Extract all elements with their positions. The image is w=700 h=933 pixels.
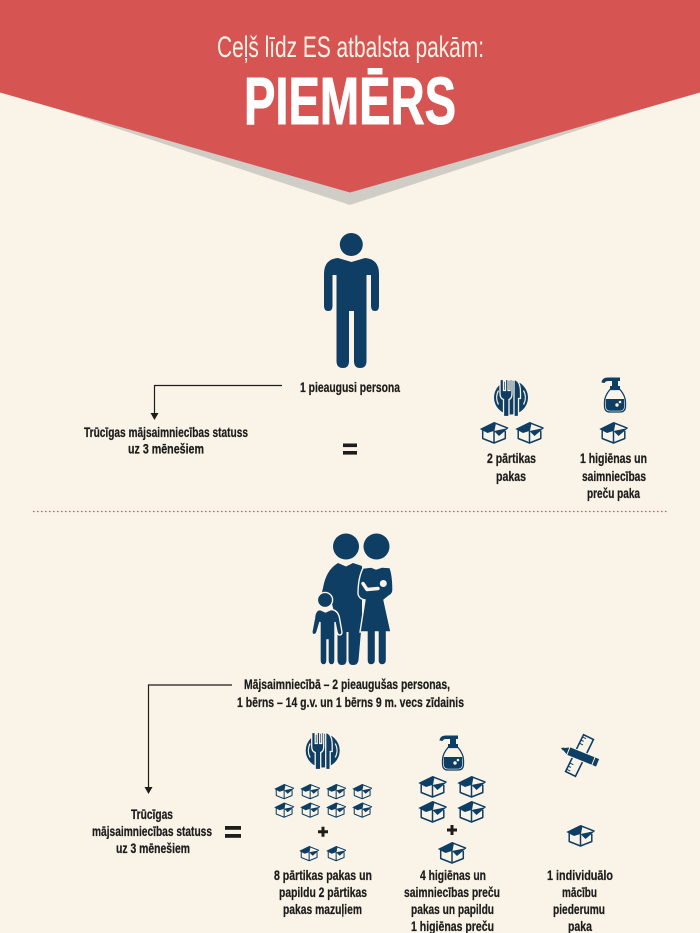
text: school pack: 1 individuālo bbox=[547, 867, 613, 883]
text: hygiene pack bbox=[580, 450, 647, 501]
text: school pack: mācību bbox=[562, 884, 597, 900]
icon: soap bbox=[602, 378, 626, 412]
text: hygiene packs 2: 4 higiēnas un bbox=[420, 867, 486, 883]
text: status 2: uz 3 mēnešiem bbox=[116, 840, 190, 856]
icon: plate 2 bbox=[306, 732, 340, 770]
text: school pack bbox=[547, 867, 613, 933]
icon: 4 hygiene boxes bbox=[418, 776, 486, 822]
text: school pack: piederumu bbox=[553, 901, 605, 917]
arrow: adult to status bbox=[150, 386, 282, 420]
icon: extra hygiene box bbox=[438, 842, 466, 863]
icon: plate bbox=[494, 380, 528, 416]
man bbox=[321, 534, 362, 665]
text: food packs 2: pakas mazuļiem bbox=[283, 901, 362, 917]
text: status: uz 3 mēnešiem bbox=[128, 440, 204, 456]
icon: 2 baby food boxes bbox=[299, 846, 346, 861]
text: household label: 1 bērns – 14 g.v. un 1 bērns 9 m. vecs zīdainis bbox=[237, 694, 464, 710]
equals sign 2 bbox=[225, 826, 241, 838]
arrow: household to status bbox=[144, 685, 232, 794]
text: hygiene pack: preču paka bbox=[587, 485, 640, 501]
text: status: Trūcīgas mājsaimniecības statuss bbox=[84, 424, 248, 440]
text: status 2: Trūcīgas bbox=[131, 806, 173, 822]
child bbox=[312, 592, 342, 665]
text: hygiene pack: 1 higiēnas un bbox=[580, 450, 647, 466]
icon: soap 2 bbox=[440, 736, 464, 770]
text: household label: Mājsaimniecībā – 2 pieaugušas personas, bbox=[244, 676, 450, 692]
text: adult label: 1 pieaugusi persona bbox=[300, 379, 400, 395]
icon: hygiene box bbox=[599, 422, 628, 443]
text: food packs: pakas bbox=[496, 468, 526, 484]
title: Ceļš līdz ES atbalsta pakām: bbox=[217, 31, 484, 64]
icon: school box bbox=[566, 825, 595, 846]
woman bbox=[358, 534, 393, 665]
text: food packs 2: 8 pārtikas pakas un bbox=[274, 867, 372, 883]
icon: family bbox=[312, 534, 393, 665]
icon: adult person bbox=[324, 233, 379, 368]
equals sign bbox=[343, 444, 357, 455]
plus sign 2 bbox=[447, 825, 457, 835]
text: food packs bbox=[487, 450, 536, 484]
icon: 8 food boxes bbox=[274, 784, 372, 817]
text: hygiene packs 2: pakas un papildu bbox=[411, 901, 494, 917]
text: hygiene packs 2 bbox=[404, 867, 500, 933]
text: hygiene packs 2: saimniecības preču bbox=[404, 884, 500, 900]
text: hygiene pack: saimniecības bbox=[582, 468, 646, 484]
heading: PIEMĒRS bbox=[244, 64, 456, 139]
text: status 2 bbox=[92, 806, 212, 856]
banner shadow bbox=[50, 106, 650, 205]
text: household label bbox=[237, 676, 464, 710]
text: food packs: 2 pārtikas bbox=[487, 450, 536, 466]
icon: pencil and ruler bbox=[559, 735, 600, 776]
header banner bbox=[0, 0, 700, 192]
icon: food boxes bbox=[480, 422, 544, 443]
text: status bbox=[84, 424, 248, 456]
text: food packs 2 bbox=[274, 867, 372, 917]
text: status 2: mājsaimniecības statuss bbox=[92, 823, 212, 839]
text: food packs 2: papildu 2 pārtikas bbox=[279, 884, 367, 900]
plus sign bbox=[318, 827, 328, 837]
